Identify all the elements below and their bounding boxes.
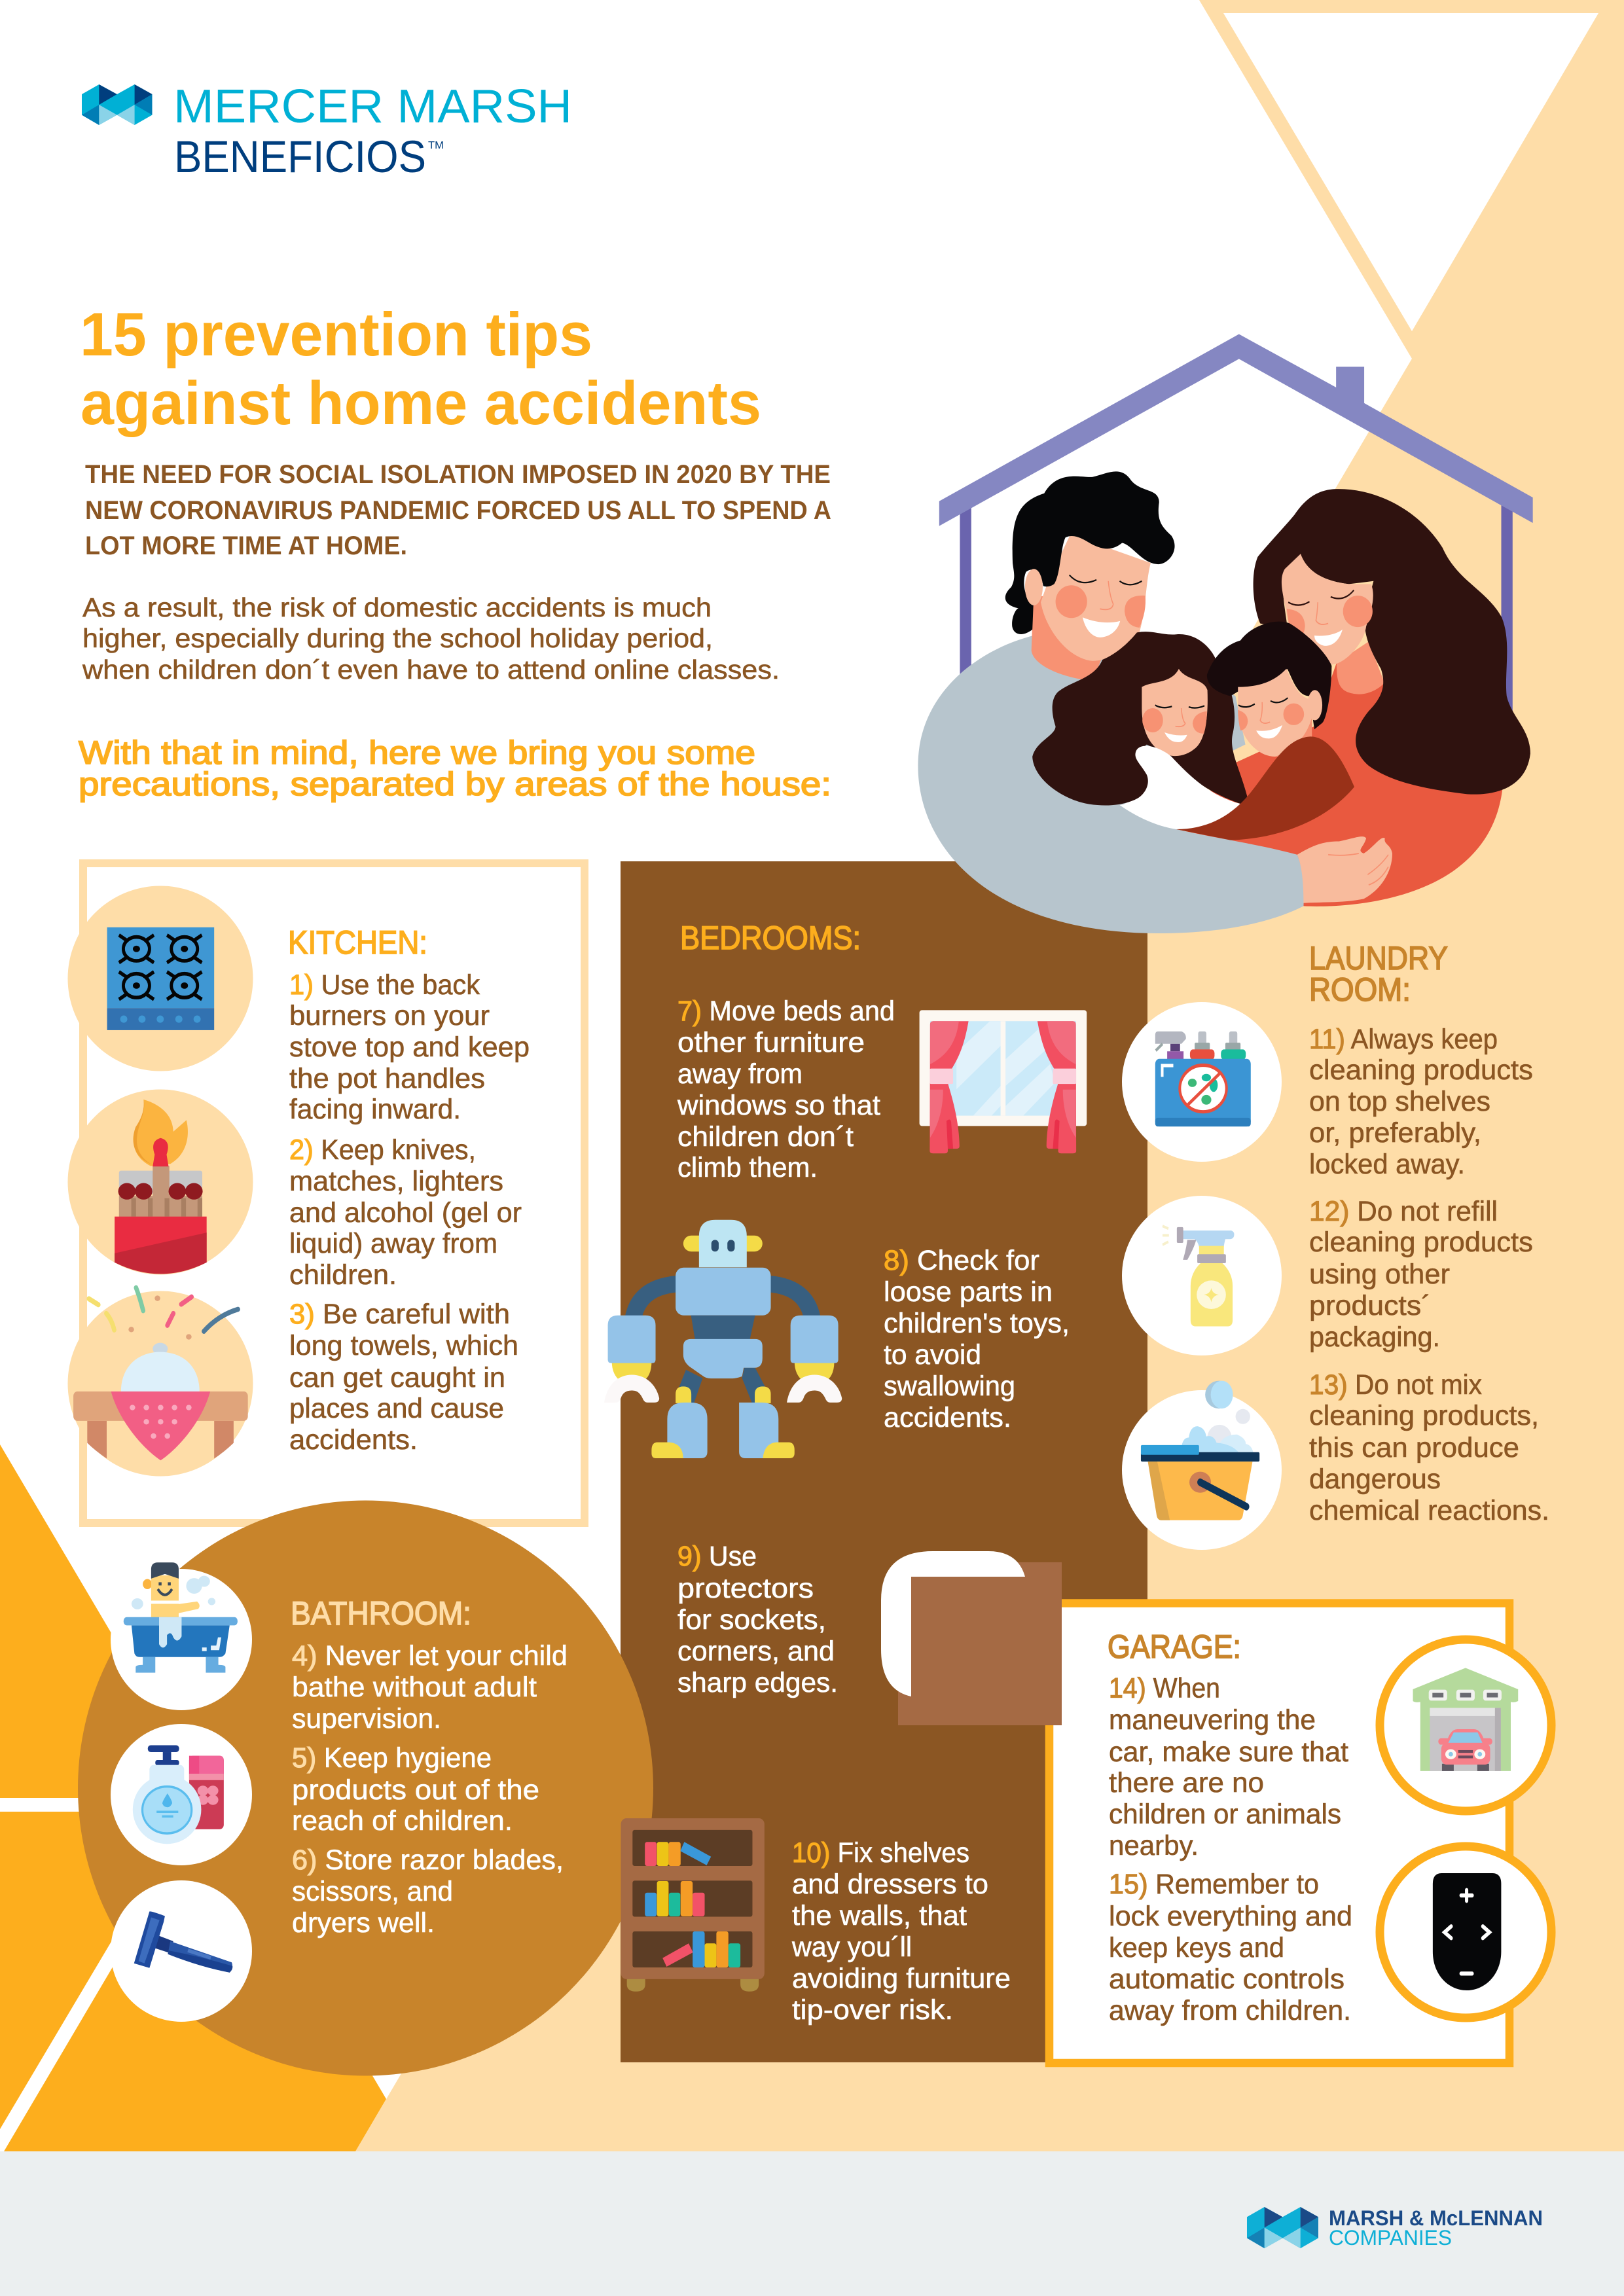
kitchen tips: stove top and keep — [289, 1031, 530, 1063]
tip 8: swallowing — [884, 1371, 1015, 1402]
intro: regular paragraph — [82, 592, 780, 685]
panel: bedrooms — [604, 920, 1087, 2026]
garage tips: 14) When — [1109, 1673, 1220, 1704]
laundry tips: using other — [1309, 1259, 1450, 1290]
kitchen tips: facing inward. — [289, 1094, 461, 1125]
tip 8 — [884, 1245, 1070, 1433]
icon: garage with car — [1413, 1668, 1518, 1771]
icon: cleaning products box — [1155, 1031, 1251, 1126]
house walls — [960, 503, 1513, 714]
bathroom tips: bathe without adult — [292, 1672, 537, 1703]
laundry tips: dangerous — [1309, 1463, 1441, 1495]
tip 10: the walls, that — [792, 1900, 967, 1931]
logo mark — [82, 84, 152, 125]
garage tips: automatic controls — [1109, 1964, 1344, 1995]
kitchen tips: matches, lighters — [289, 1166, 503, 1197]
tip 10: and dressers to — [792, 1869, 988, 1900]
laundry heading — [1309, 940, 1448, 1008]
intro: bold paragraph: NEW CORONAVIRUS PANDEMIC FORCED US ALL TO SPEND A — [85, 496, 831, 525]
tip 8: to avoid — [884, 1339, 981, 1371]
logo text: MERCER MARSH — [173, 81, 572, 133]
garage tips: children or animals — [1109, 1799, 1341, 1830]
logo: Mercer Marsh Beneficios: BENEFICIOS — [174, 132, 426, 182]
footer logo: Marsh & McLennan Companies: COMPANIES — [1329, 2226, 1452, 2250]
icon: matches — [115, 1100, 207, 1274]
icon circles: kitchen — [68, 886, 253, 1477]
title: 15 prevention tips — [80, 300, 592, 368]
tip 7: windows so that — [677, 1090, 880, 1121]
bathroom tips: dryers well. — [292, 1907, 435, 1939]
tip 10: way you´ll — [791, 1931, 912, 1963]
logo: Mercer Marsh Beneficios — [82, 81, 572, 182]
tip 9: 9) Use — [677, 1541, 757, 1572]
kitchen tips: burners on your — [289, 1000, 490, 1031]
panel: bathroom — [78, 1500, 653, 2076]
icon: remote control — [1433, 1873, 1501, 1990]
garage tips: 15) Remember to — [1109, 1869, 1319, 1900]
kitchen tips — [289, 969, 530, 1456]
kitchen tips: 3) Be careful with — [289, 1299, 510, 1330]
icon: bookshelf — [621, 1818, 765, 1992]
tip 9 — [677, 1541, 838, 1698]
tip 9: corners, and — [677, 1636, 835, 1667]
bathroom tips: 4) Never let your child — [292, 1640, 568, 1672]
laundry tips: chemical reactions. — [1309, 1495, 1549, 1526]
bedrooms heading: BEDROOMS: — [680, 920, 861, 956]
tip 8: loose parts in — [884, 1276, 1053, 1308]
tip 10 — [791, 1837, 1011, 2026]
icon circles: laundry — [1122, 1002, 1282, 1550]
laundry tips: products´ — [1309, 1290, 1431, 1321]
tip 9: sharp edges. — [677, 1667, 838, 1698]
laundry tips: packaging. — [1309, 1321, 1440, 1353]
laundry tips: or, preferably, — [1309, 1117, 1481, 1149]
tip 7: climb them. — [677, 1152, 818, 1183]
laundry tips: 12) Do not refill — [1309, 1196, 1498, 1227]
kitchen tips: accidents. — [289, 1424, 418, 1456]
father — [918, 471, 1304, 933]
background: white triangle — [1223, 13, 1598, 331]
panel: bedrooms background — [621, 861, 1147, 2062]
title — [80, 300, 761, 437]
footer logo: Marsh & McLennan Companies — [1247, 2206, 1543, 2250]
bathroom tips: reach of children. — [292, 1805, 513, 1837]
logo: Mercer Marsh Beneficios: TM — [428, 140, 444, 151]
tip 9: for sockets, — [677, 1604, 826, 1636]
laundry tips: cleaning products — [1309, 1227, 1533, 1258]
tip 10: 10) Fix shelves — [792, 1837, 969, 1869]
kitchen tips: long towels, which — [289, 1330, 518, 1361]
icon: child in bathtub — [124, 1562, 238, 1673]
bathroom tips: scissors, and — [292, 1876, 453, 1907]
intro: bold paragraph: LOT MORE TIME AT HOME. — [85, 531, 407, 560]
icon: hygiene products — [133, 1745, 224, 1844]
lead-in line: precautions, separated by areas of the house: — [79, 766, 831, 802]
icon circles: bathroom — [111, 1569, 252, 2022]
illustration: family inside house — [918, 334, 1533, 933]
title: against home accidents — [81, 368, 761, 437]
bathroom tips — [292, 1640, 568, 1939]
footer logo mark — [1247, 2207, 1318, 2248]
mother — [1176, 489, 1530, 906]
icon: table with towel and cloche — [73, 1287, 248, 1460]
bathroom tips: products out of the — [292, 1774, 539, 1806]
kitchen tips: 2) Keep knives, — [289, 1134, 476, 1166]
kitchen tips: and alcohol (gel or — [289, 1197, 522, 1229]
tip 7 — [677, 996, 895, 1183]
lead-in line: With that in mind, here we bring you some — [79, 734, 755, 771]
icon: bucket with foam — [1141, 1381, 1259, 1520]
panel: laundry room — [1122, 940, 1549, 1550]
tip 9: protectors — [677, 1573, 814, 1604]
intro: regular paragraph: when children don´t even have to attend online classes. — [82, 655, 780, 685]
kitchen tips: liquid) away from — [289, 1228, 497, 1259]
garage tips: maneuvering the — [1109, 1704, 1316, 1736]
laundry tips: this can produce — [1309, 1432, 1519, 1463]
icon: window with curtains — [920, 1010, 1087, 1153]
footer logo text: MARSH & McLENNAN — [1329, 2206, 1543, 2230]
kitchen tips: places and cause — [289, 1393, 504, 1424]
icon: stove — [107, 927, 214, 1030]
laundry tips — [1309, 1024, 1549, 1526]
laundry tips: 13) Do not mix — [1309, 1369, 1482, 1401]
house roof — [939, 334, 1533, 526]
kitchen tips: 1) Use the back — [289, 969, 480, 1001]
icon: spray bottle — [1163, 1226, 1234, 1326]
bathroom heading: BATHROOM: — [291, 1595, 471, 1632]
panel: kitchen — [68, 863, 585, 1523]
boy — [1176, 622, 1354, 840]
garage heading: GARAGE: — [1108, 1628, 1241, 1665]
garage tips: lock everything and — [1109, 1901, 1352, 1932]
panel: garage — [1049, 1604, 1551, 2063]
kitchen tips: the pot handles — [289, 1063, 485, 1094]
kitchen heading: KITCHEN: — [288, 924, 427, 961]
tip 8: accidents. — [884, 1402, 1011, 1433]
garage tips: keep keys and — [1109, 1932, 1284, 1964]
laundry tips: cleaning products, — [1309, 1400, 1539, 1431]
laundry tips: 11) Always keep — [1309, 1024, 1498, 1055]
tip 10: tip-over risk. — [792, 1994, 953, 2026]
bathroom tips: 6) Store razor blades, — [292, 1844, 564, 1876]
background: orange triangle — [0, 1444, 386, 2151]
tip 10: avoiding furniture — [792, 1963, 1011, 1994]
bathroom tips: 5) Keep hygiene — [292, 1742, 492, 1774]
tip 7: away from — [677, 1058, 803, 1090]
icon: toy robot — [604, 1220, 842, 1458]
intro: bold paragraph: THE NEED FOR SOCIAL ISOLATION IMPOSED IN 2020 BY THE — [85, 460, 831, 489]
tip 8: 8) Check for — [884, 1245, 1039, 1276]
tip 8: children's toys, — [884, 1308, 1070, 1339]
laundry tips: on top shelves — [1309, 1086, 1490, 1117]
laundry heading: LAUNDRY — [1309, 940, 1448, 977]
icon circles: garage — [1380, 1640, 1551, 2018]
garage tips: car, make sure that — [1109, 1736, 1348, 1768]
tip 7: other furniture — [677, 1027, 865, 1058]
kitchen tips: can get caught in — [289, 1362, 505, 1393]
bathroom tips: supervision. — [292, 1703, 441, 1734]
garage tips — [1109, 1673, 1352, 2026]
laundry heading: ROOM: — [1309, 971, 1411, 1008]
intro: regular paragraph: higher, especially during the school holiday period, — [82, 623, 713, 653]
laundry tips: cleaning products — [1309, 1054, 1533, 1086]
lead-in line — [79, 734, 831, 802]
garage tips: there are no — [1109, 1767, 1264, 1799]
icon: razor — [134, 1911, 232, 1973]
intro: regular paragraph: As a result, the risk of domestic accidents is much — [82, 592, 712, 622]
father's hand — [1297, 836, 1392, 903]
background: peach shape — [355, 0, 1624, 2151]
icon: socket corner protector — [881, 1551, 1062, 1725]
girl — [1032, 632, 1248, 829]
kitchen tips: children. — [289, 1259, 397, 1291]
intro: bold paragraph — [85, 460, 831, 560]
tip 7: children don´t — [677, 1121, 854, 1153]
footer band — [0, 2151, 1624, 2296]
tip 7: 7) Move beds and — [677, 996, 895, 1027]
garage tips: nearby. — [1109, 1830, 1199, 1861]
garage tips: away from children. — [1109, 1995, 1351, 2026]
laundry tips: locked away. — [1309, 1149, 1465, 1180]
